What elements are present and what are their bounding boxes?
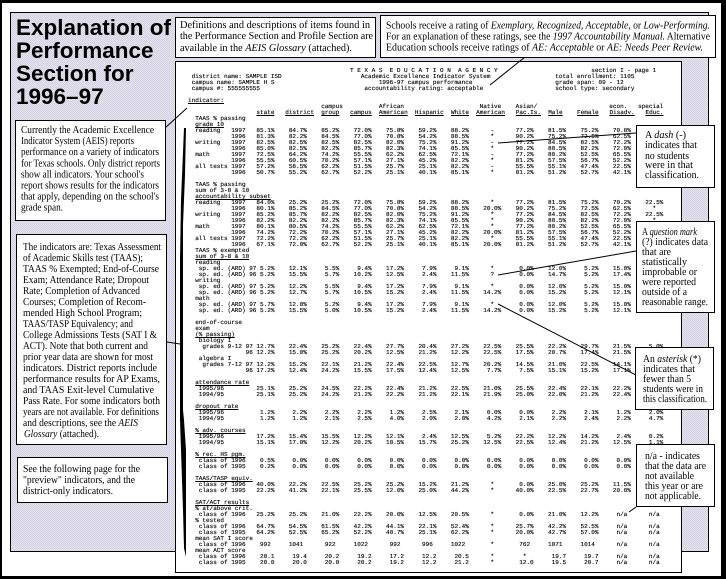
callout: dash: indicates that	[645, 140, 697, 151]
callout: see following page: district-only indicators.	[23, 486, 113, 497]
arrow: n/a callout to n/a	[629, 507, 636, 512]
callout: AEIS overview: show all indicators. Your school's	[21, 169, 144, 180]
callout: AEIS overview	[16, 120, 166, 220]
arrow: overview to indicator label	[165, 108, 187, 128]
callout: asterisk	[636, 348, 714, 410]
callout: AEIS overview: report shows results for the indicators	[21, 180, 159, 192]
table: dropout rate: dropout rate 1995/96 1.2% 2.2% 2.2% 2.2% 1.2% 2.5% 2.1% 0.0% 0.0% 2.2% 2.1% 1.2% 2.0% 1994/95 1.2% 1.2% 2.1% 2.5% 4.0% 2.0% 2.0% 4.2% 2.1% 2.2% 2.4% 2.2% 4.7%	[188, 403, 663, 422]
callout: n/a: that the data are	[645, 461, 706, 472]
callout: list of indicators: indicators. District reports include	[23, 363, 157, 374]
callout: n/a: not available	[645, 471, 694, 482]
callout: list of indicators	[16, 234, 166, 444]
callout: n/a: this year or are	[645, 481, 703, 492]
callout: see following page	[18, 458, 168, 502]
table: end-of-course exam: end-of-course exam (% passing) biology I grades 9-12 97 12.7% 22.4% 25.2% 22.4% 27.7% 20.4% 27.2% 22.5% 25.5% 22.2% 29.7% 21.5% 5.0% 96 12.2% 15.0% 25.2% 20.2% 12.5% 21.2% 12.2% 22.5% 17.5% 20.7% 17.4% 21.5% algebra I grades 7-12 97 12.2% 15.2% 22.1% 21.2% 22.4% 22.5% 12.7% 20.2% 14.5% 21.0% 22.5% 14.1% 96 17.2% 12.4% 24.2% 15.5% 17.5% 12.4% 12.5% 7.7% 7.5% 15.1% 15.2% 17.1%	[188, 319, 663, 374]
table: % advanced courses: % adv. courses 1995/96 17.2% 15.4% 15.5% 12.2% 12.1% 2.4% 12.5% 5.2% 22.2% 12.2% 14.2% 2.4% 0.2% 1994/95 15.1% 17.0% 12.2% 20.2% 10.5% 15.7% 25.2% 12.5% 22.5% 12.4% 21.2% 12.5% 1.1%	[188, 427, 663, 446]
table: attendance rate: attendance rate 1995/96 25.1% 25.2% 24.5% 22.2% 22.4% 21.2% 22.5% 21.0% 25.5% 22.4% 22.1% 22.2% 1994/95 25.1% 25.2% 24.2% 21.2% 22.2% 21.2% 22.1% 21.9% 25.0% 22.0% 21.2% 22.4%	[188, 379, 631, 398]
title: 1996–97	[16, 84, 104, 109]
callout: n/a	[636, 444, 714, 506]
callout: question mark: (?) indicates data	[642, 237, 708, 248]
callout: list of indicators: Rate; Completion of Advanced	[23, 286, 141, 297]
callout: dash: were in that	[645, 160, 693, 171]
arrow: dash callout to dash	[498, 133, 636, 143]
callout: asterisk: indicates that	[643, 364, 695, 375]
callout: list of indicators: ACT). Note that both current and	[23, 341, 149, 352]
callout: list of indicators: Glossary (attached).	[24, 429, 99, 440]
callout: asterisk: An asterisk (*)	[643, 354, 701, 365]
callout: definitions	[176, 18, 376, 58]
callout: list of indicators: of Academic Skills test (TAAS);	[23, 253, 143, 264]
callout: asterisk: this classification.	[643, 394, 707, 405]
callout: AEIS overview: Currently the Academic Excellence	[21, 125, 154, 136]
table: % recommended HS program: % rec. HS pgm. class of 1996 0.5% 0.0% 0.0% 0.0% 0.0% 0.0% 0.0% 0.0% 0.0% 0.0% 0.0% 0.0% class of 1995 0.2% 0.0% 0.0% 0.0% 0.0% 0.0% 0.0% 0.0% 0.0% 0.0% 0.0% 0.0%	[188, 451, 631, 470]
callout: question mark: improbable or	[642, 267, 697, 278]
callout: list of indicators: The indicators are: Texas Assessment	[23, 242, 161, 253]
arrow: indicators list to bracket	[167, 342, 180, 344]
arrow: question mark callout to question mark	[498, 251, 636, 275]
callout: dash	[636, 126, 714, 188]
callout: list of indicators: College Admissions Tests (SAT I &	[23, 330, 158, 341]
callout: question mark: statistically	[642, 257, 688, 268]
title: Performance	[16, 38, 154, 63]
callout: AEIS overview: for Texas schools. Only district reports	[21, 158, 160, 169]
arrow: asterisk callout to asterisk	[498, 304, 636, 375]
callout: ratings	[380, 16, 716, 58]
callout: question mark: outside of a	[642, 287, 687, 298]
callout: n/a: not applicable.	[645, 491, 701, 502]
table: TAAS % passing grade 10: TAAS % passing grade 10 reading 1997 85.1% 84.7% 85.2% 72.0% 75.8% 59.2% 88.2% - 77.2% 81.5% 75.2% 70.8% 1996 81.3% 82.2% 84.5% 77.0% 70.8% 54.2% 88.5% * 90.2% 75.2% 72.5% 62.5% writing 1997 82.5% 82.5% 82.5% 82.5% 82.0% 75.2% 91.2% - 77.2% 84.5% 82.5% 72.2% 1996 85.0% 82.5% 82.2% 85.7% 82.3% 74.1% 85.5% * 90.2% 80.5% 82.2% 72.0% math 1997 72.5% 64.2% 74.2% 55.5% 62.2% 62.5% 72.1% - 77.2% 80.2% 52.5% 65.5% 1996 55.5% 60.5% 70.2% 57.1% 27.1% 45.2% 82.2% * 81.2% 57.5% 56.7% 52.2% all tests 1997 57.2% 58.5% 62.2% 51.5% 25.7% 25.1% 82.2% - 55.5% 55.1% 47.4% 22.5% 1996 50.7% 55.2% 62.7% 52.2% 25.1% 40.1% 85.1% * 81.2% 51.2% 52.7% 42.1%	[188, 115, 631, 176]
callout: see following page: See the following page for the	[23, 464, 140, 475]
callout: AEIS overview: Indicator System (AEIS) reports	[21, 136, 134, 147]
panel: sample performance report sheet	[175, 61, 682, 573]
callout: AEIS overview: grade span.	[21, 203, 63, 214]
callout: see following page: "preview" indicators, and the	[23, 475, 135, 486]
callout: question mark	[636, 222, 714, 312]
callout: definitions: available in the AEIS Glossary (attached).	[180, 43, 352, 54]
callout: dash: no students	[645, 151, 689, 162]
callout: definitions: Definitions and descriptions of items found in	[180, 20, 371, 31]
table: TAAS % passing accountability subset: TAAS % passing sum of 3-8 & 10 accountability subset reading 1997 84.0% 25.2% 25.2% 72.0% 75.8% 59.2% 88.2% * 77.2% 81.5% 75.2% 70.2% 22.5% 1996 80.1% 85.2% 84.5% 77.0% 70.8% 54.2% 88.5% 20.0% 90.2% 75.2% 72.5% 62.5% * writing 1997 85.2% 85.7% 82.2% 82.5% 82.0% 75.2% 91.2% * 77.2% 84.5% 82.5% 72.2% 22.5% 1996 82.2% 82.2% 82.2% 85.7% 82.3% 74.1% 85.5% * 90.2% 80.5% 82.2% 72.0% * math 1997 80.1% 80.5% 74.2% 55.5% 62.2% 62.5% 72.1% * 77.2% 80.2% 52.5% 65.5% 1996 74.2% 72.2% 70.2% 57.1% 27.1% 45.2% 82.2% 20.0% 81.2% 57.5% 56.7% 52.2% all tests 1997 72.2% 72.2% 62.2% 51.5% 25.7% 25.1% 82.2% * 55.5% 55.1% 47.4% 22.5% 1996 67.1% 72.0% 62.7% 52.2% 25.1% 40.1% 85.1% 20.0% 81.2% 51.2% 52.7% 42.1%	[188, 181, 663, 248]
table: SAT/ACT results: SAT/ACT results % at/above crit. class of 1996 25.2% 25.2% 21.0% 22.2% 20.0% 12.5% 20.5% * 0.0% 21.0% 12.2% n/a n/a % tested class of 1996 64.7% 54.5% 61.5% 42.2% 44.1% 22.1% 52.4% * 25.7% 42.2% 52.5% n/a n/a class of 1995 64.2% 52.5% 65.2% 52.2% 40.7% 25.1% 62.2% * 20.0% 42.7% 57.0% n/a n/a mean SAT I score class of 1996 992 1041 922 1022 992 996 1022 * 762 1071 1014 n/a n/a mean ACT score class of 1996 20.1 19.4 20.2 19.2 17.2 12.2 20.5 * * 19.7 19.7 n/a n/a class of 1995 20.0 20.0 20.0 20.2 19.2 12.2 21.2 * 12.0 19.5 20.7 n/a n/a	[188, 499, 660, 566]
callout: list of indicators: Courses; Completion of Recom-	[23, 297, 146, 308]
callout: list of indicators: mended High School Program;	[23, 308, 142, 319]
callout: list of indicators: years are not available. For definitions	[23, 407, 159, 418]
callout: n/a: n/a - indicates	[645, 451, 700, 462]
callout: asterisk: fewer than 5	[643, 374, 691, 385]
table: TAAS/TASP equivalency: TAAS/TASP equiv. class of 1996 40.0% 22.2% 22.5% 25.2% 25.2% 15.2% 21.2% * 0.0% 25.0% 25.2% 11.5% class of 1995 22.2% 41.2% 22.1% 25.5% 12.0% 25.0% 44.2% * 40.0% 22.5% 22.7% 20.0%	[188, 475, 631, 494]
callout: dash: classification.	[645, 170, 699, 181]
title: Section for	[16, 61, 134, 86]
bracket: TAAS and indicator rows	[180, 128, 186, 557]
callout: question mark: were reported	[642, 277, 697, 288]
callout: list of indicators: TAAS % Exempted; End-of-Course	[23, 264, 159, 275]
arrow: ratings to accountability rating	[490, 57, 525, 85]
report column headings: indicator: campus African Native Asian/ econ. special state district group campus American Hispanic White American Pac.Is. Male Female Disadv. Educ.	[188, 97, 663, 116]
callout: question mark: reasonable range.	[642, 297, 708, 308]
callout: asterisk: students were in	[643, 384, 704, 395]
callout: list of indicators: and TAAS Exit-level Cumulative	[23, 385, 154, 396]
callout: AEIS overview: that apply, depending on the school's	[21, 192, 159, 203]
title	[16, 15, 172, 109]
callout: list of indicators: and descriptions, see the AEIS	[23, 418, 139, 429]
callout: AEIS overview: performance on a variety of indicators	[21, 147, 159, 158]
callout: list of indicators: performance results for AP Exams,	[23, 374, 160, 385]
callout: list of indicators: Exam; Attendance Rate; Dropout	[23, 275, 149, 286]
callout: list of indicators: TAAS/TASP Equivalency; and	[23, 319, 134, 330]
callout: list of indicators: Pass Rate. For some indicators both	[23, 396, 161, 407]
callout: dash: A dash (-)	[645, 130, 686, 141]
title: Explanation of	[16, 15, 171, 40]
callout: question mark: A question mark	[642, 227, 697, 238]
callout: ratings: Schools receive a rating of Exemplary, Recognized, Acceptable, or Low-Performing.	[386, 20, 710, 32]
callout: definitions: the Performance Section and Profile Section are	[180, 31, 373, 42]
table: TAAS % exempted: TAAS % exempted sum of 3-8 & 10 reading sp. ed. (ARD) 97 5.2% 12.1% 5.5% 9.4% 17.2% 7.9% 9.1% * 0.0% 12.0% 5.2% 15.0% sp. ed. (ARD) 96 5.2% 15.5% 5.7% 10.2% 12.5% 2.4% 11.5% ? 0.0% 14.7% 5.2% 17.4% writing sp. ed. (ARD) 97 5.2% 12.2% 5.5% 9.4% 17.2% 7.9% 9.1% * 0.0% 12.0% 5.2% 15.0% sp. ed. (ARD) 96 5.2% 12.7% 5.7% 10.5% 15.2% 2.4% 11.5% 14.2% 0.0% 15.2% 5.2% 12.1% math sp. ed. (ARD) 97 5.7% 12.0% 5.2% 9.4% 17.2% 7.9% 9.1% * 0.0% 12.0% 5.2% 15.0% sp. ed. (ARD) 96 5.2% 15.5% 5.0% 10.5% 15.2% 2.4% 11.5% 14.2% 0.0% 15.2% 5.2% 12.1%	[188, 247, 631, 314]
callout: ratings: For an explanation of these ratings, see the 1997 Accountability Manual. Alternative	[386, 32, 710, 42]
report header: T E X A S E D U C A T I O N A G E N C Y section I - page 1 district name: SAMPLE ISD Academic Excellence Indicator System total enrollment: 1105 campus name: SAMPLE H S 1996-97 campus performance grade span: 09 - 12 campus #: 555555555 accountability rating: acceptable school type: secondary	[188, 67, 656, 92]
callout: list of indicators: prior year data are shown for most	[23, 352, 153, 363]
callout: ratings: Education schools receive ratings of AE: Acceptable or AE: Needs Peer Review.	[386, 42, 703, 54]
callout: question mark: that are	[642, 247, 671, 258]
